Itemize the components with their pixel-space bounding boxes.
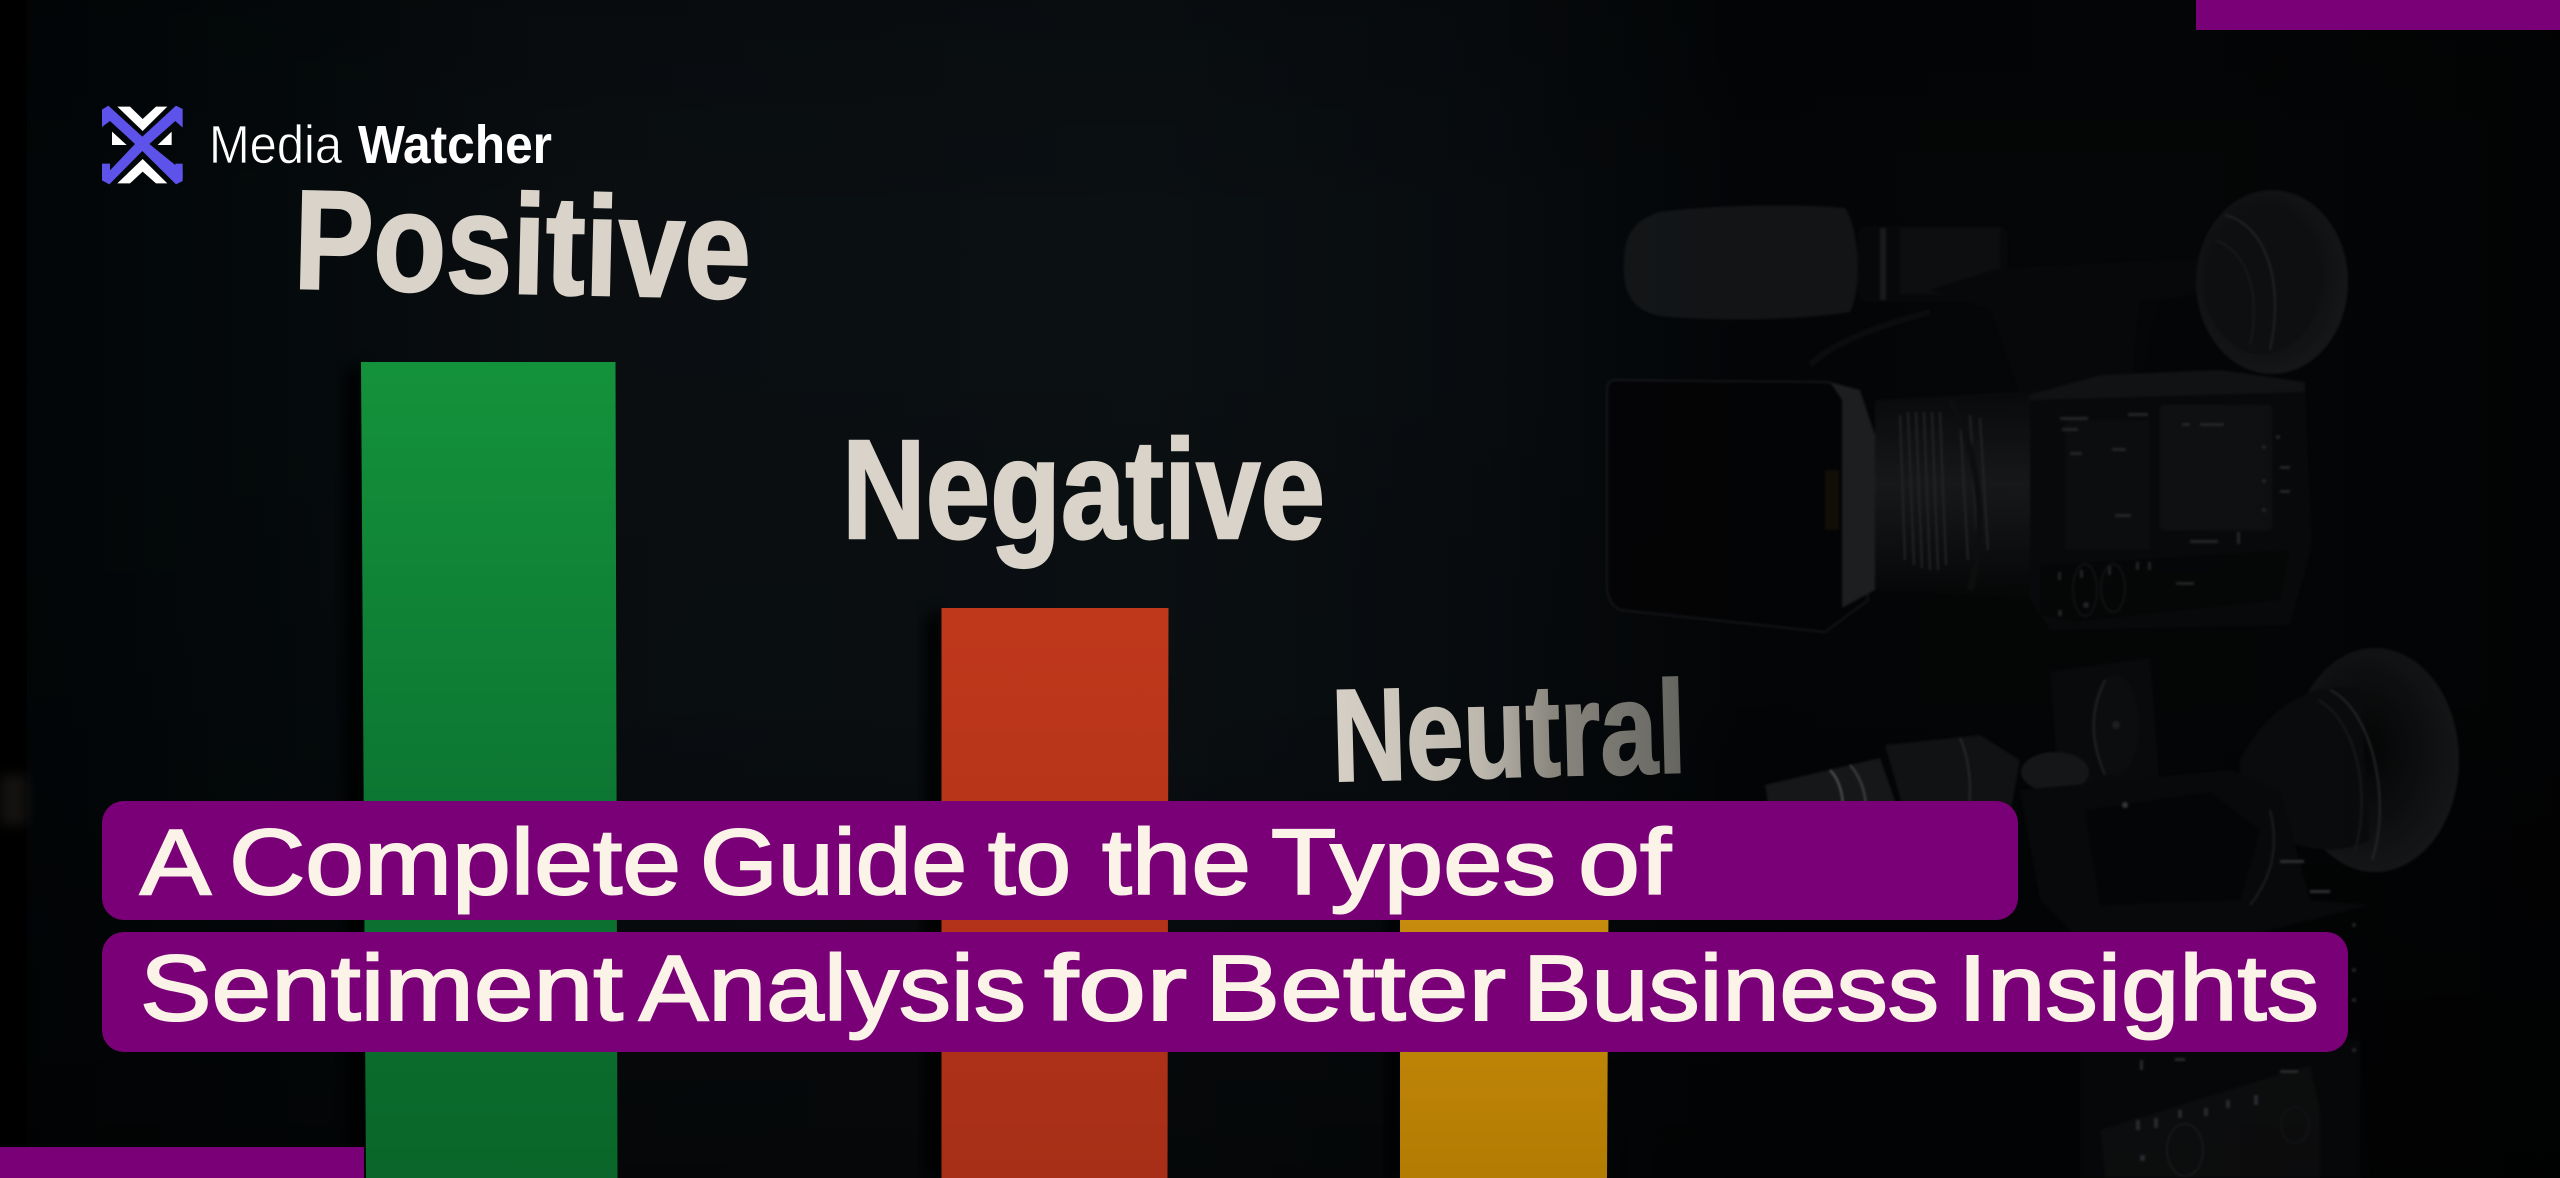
title text line 2: Analysis (639, 936, 1026, 1040)
lens barrel with focus ring (1875, 390, 2040, 600)
camera button strip (2040, 550, 2290, 622)
title text line 1: Guide (700, 810, 967, 914)
title text line 2: for (1044, 936, 1187, 1040)
plate highlight (2030, 370, 2305, 400)
handle frame (2020, 770, 2370, 940)
title text line 1: A (140, 810, 211, 914)
bar: neutral (yellow) (1388, 815, 1609, 1178)
title text line 1: Types (1271, 810, 1556, 914)
title text line 1: Complete (229, 810, 681, 914)
title pill: line 2 (102, 932, 2348, 1052)
bar: negative (red) (925, 608, 1168, 1178)
label: Neutral: Neutral (1330, 653, 1688, 809)
title text line 1: to (988, 810, 1071, 914)
microphone body (1858, 226, 2008, 302)
title text line 1: the (1102, 810, 1251, 914)
title text line 1 (140, 810, 1671, 914)
wordmark: Watcher: Watcher (358, 115, 552, 175)
top-right accent bar (2196, 0, 2560, 30)
bottom-left accent bar (0, 1147, 364, 1178)
title text line 2: Sentiment (140, 936, 623, 1040)
title text line 2: Business (1523, 936, 1939, 1040)
title text line 2: Insights (1958, 936, 2319, 1040)
bar: positive (green) (345, 361, 618, 1178)
camera body (2030, 385, 2312, 630)
lower camera body (1625, 923, 2370, 1178)
lens matte box (1607, 380, 1875, 632)
large eyepiece hood (2240, 648, 2459, 872)
wordmark: Media: Media (209, 115, 343, 175)
title pill: line 1 (102, 801, 2018, 920)
label: Positive: Positive (292, 160, 753, 328)
small lens barrel (1765, 735, 2089, 815)
microphone foam (1624, 205, 1858, 319)
icon: crossed arrows mark (102, 106, 183, 184)
mounting plate (2050, 658, 2160, 800)
illustration: lower video camera (1625, 648, 2459, 1178)
top handle (1930, 258, 2225, 395)
eyepiece hood (2196, 190, 2348, 374)
viewfinder support (2140, 290, 2240, 395)
title text line 2 (140, 936, 2319, 1040)
logo: Media Watcher (102, 106, 552, 184)
title text line 2: Better (1205, 936, 1506, 1040)
label: Negative: Negative (842, 410, 1325, 568)
illustration: upper video camera (1607, 190, 2348, 632)
title text line 1: of (1578, 810, 1671, 914)
bar chart: sentiment bars (345, 361, 1609, 1178)
